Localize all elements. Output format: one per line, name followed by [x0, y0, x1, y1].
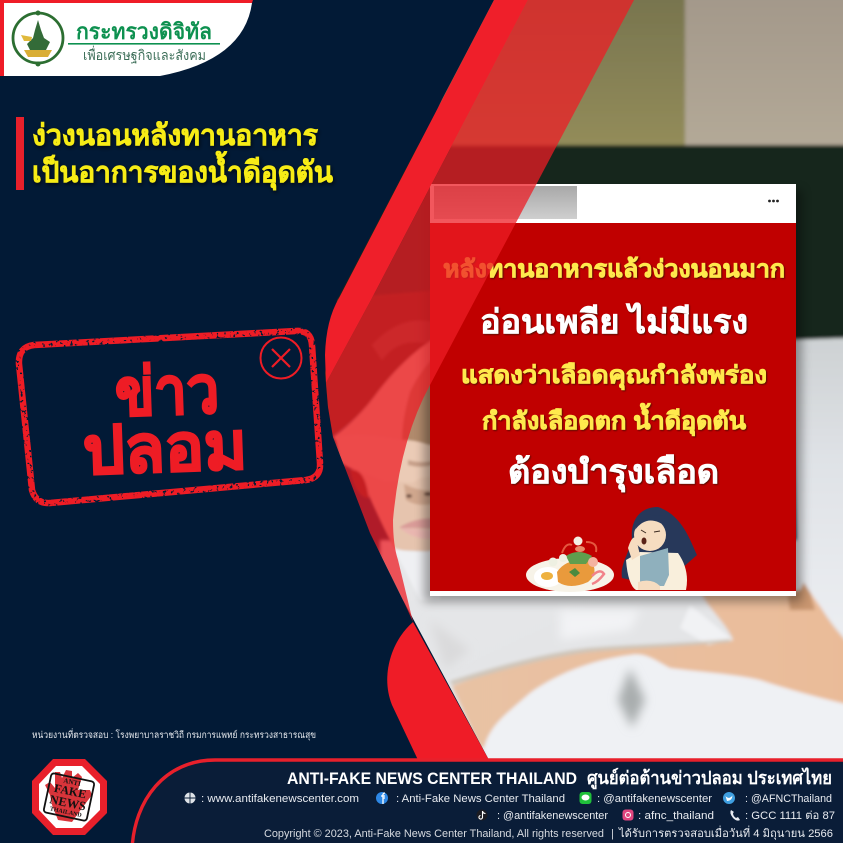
ministry tagline: เพื่อเศรษฐกิจและสังคม — [83, 46, 206, 64]
post text lines: อ่อนเพลีย ไม่มีแรง — [480, 302, 748, 340]
contact rows: : @AFNCThailand — [745, 793, 832, 805]
icon: line — [580, 792, 592, 804]
icon: tiktok — [476, 810, 488, 820]
stamp wordmark — [43, 773, 95, 821]
contact rows: ได้รับการตรวจสอบเมื่อวันที่ 4 มิถุนายน 2566 — [618, 825, 833, 840]
contact rows: Copyright © 2023, Anti-Fake News Center Thailand, All rights reserved — [264, 828, 604, 840]
photo: woman sleeping in bed — [318, 0, 843, 765]
contact rows: | — [611, 828, 614, 840]
icon: ministry emblem — [13, 10, 63, 66]
bright red lower curved shape — [387, 622, 489, 760]
stamp text: ปลอม — [82, 408, 248, 488]
post text lines: หลังทานอาหารแล้วง่วงนอนมาก — [443, 256, 785, 283]
stamp wordmark: FAKE — [53, 781, 88, 801]
post text lines: แสดงว่าเลือดคุณกำลังพร่อง — [461, 362, 767, 391]
icon: instagram — [622, 810, 634, 820]
bright red diagonal stripe — [325, 0, 528, 383]
title: เป็นอาการของน้ำดีอุดตัน — [32, 150, 333, 190]
post text lines: กำลังเลือดตก น้ำดีอุดตัน — [482, 402, 747, 437]
icon: globe — [184, 792, 196, 804]
post text lines: ต้องบำรุงเลือด — [508, 453, 719, 493]
source note: หน่วยงานที่ตรวจสอบ : โรงพยาบาลราชวิถี กรมการแพทย์ กระทรวงสาธารณสุข — [32, 728, 316, 741]
contact rows: : www.antifakenewscenter.com — [201, 793, 359, 805]
contact rows: : @antifakenewscenter — [597, 793, 712, 805]
stamp wordmark: ANTI — [63, 777, 82, 788]
icon: facebook — [376, 792, 388, 804]
panel: fake social media post — [424, 184, 802, 602]
stamp text: ข่าว — [114, 352, 220, 430]
logo: anti-fake news stop sign — [32, 759, 107, 835]
ministry name: กระทรวงดิจิทัล — [76, 19, 212, 44]
stamp wordmark: THAILAND — [49, 806, 83, 819]
translucent red diagonal overlay — [326, 0, 634, 622]
contact rows: : afnc_thailand — [638, 810, 714, 822]
title: ง่วงนอนหลังทานอาหาร — [32, 120, 318, 152]
blurred account name — [434, 186, 577, 219]
stamp: fake news — [19, 331, 320, 503]
title — [16, 117, 333, 190]
contact rows: : Anti-Fake News Center Thailand — [396, 793, 565, 805]
footer panel — [132, 760, 843, 843]
icon: plate of food — [526, 536, 614, 592]
stamp wordmark: NEWS — [48, 792, 87, 814]
icon: x in circle — [260, 338, 302, 378]
stamp text — [80, 351, 248, 488]
header: ministry logo panel — [0, 0, 253, 76]
contact rows — [201, 793, 835, 840]
icon: phone — [730, 810, 740, 821]
icon: sleepy woman illustration — [622, 507, 697, 590]
contact rows: : @antifakenewscenter — [497, 810, 608, 822]
post menu dots — [768, 200, 779, 202]
icon: red hand — [45, 770, 92, 822]
contact rows: : GCC 1111 ต่อ 87 — [745, 810, 835, 822]
post text lines — [443, 256, 785, 493]
icon: twitter — [723, 792, 735, 804]
footer headline: ANTI-FAKE NEWS CENTER THAILAND — [287, 769, 577, 788]
